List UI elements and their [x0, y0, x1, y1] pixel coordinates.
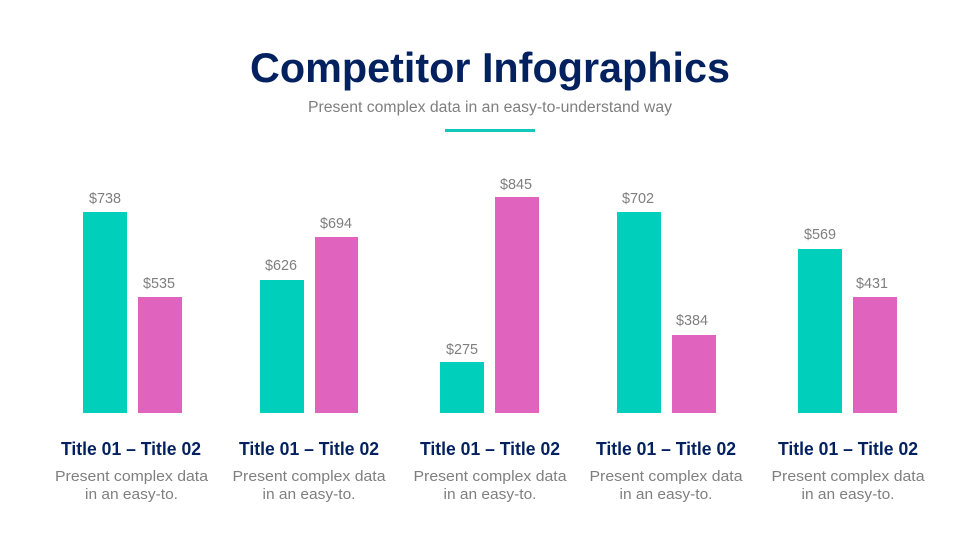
description: Present complex data — [55, 468, 209, 485]
description — [232, 468, 386, 503]
description: in an easy-to. — [262, 486, 356, 503]
bar: pink 694 — [315, 237, 358, 413]
value: 738: $738 — [89, 190, 121, 207]
bar: pink 845 — [495, 197, 539, 413]
subtitle: Present complex data in an easy-to-understand way — [308, 99, 672, 116]
bar: teal 626 — [260, 280, 304, 413]
description: Present complex data — [590, 468, 743, 485]
value: 694: $694 — [320, 215, 352, 232]
bar: teal 738 — [83, 212, 127, 413]
description: in an easy-to. — [85, 486, 178, 503]
description: in an easy-to. — [802, 486, 894, 503]
value: 431: $431 — [856, 275, 888, 292]
description: in an easy-to. — [620, 486, 712, 503]
heading: Title 01 – Title 02 — [778, 439, 918, 459]
bar: pink 431 — [853, 297, 897, 413]
panel: group 5 — [772, 226, 925, 503]
description: Present complex data — [772, 468, 925, 485]
heading: Title 01 – Title 02 — [61, 439, 201, 459]
bar: teal 702 — [617, 212, 661, 413]
bar: pink 535 — [138, 297, 182, 413]
value: 845: $845 — [500, 176, 532, 193]
heading: Title 01 – Title 02 — [420, 439, 560, 459]
bar: teal 569 — [798, 249, 842, 413]
description: in an easy-to. — [444, 486, 536, 503]
panel: group 2 — [232, 215, 386, 503]
value: 275: $275 — [446, 341, 478, 358]
value: 702: $702 — [622, 190, 654, 207]
accent underline — [445, 129, 535, 132]
heading: Title 01 – Title 02 — [239, 439, 379, 459]
bar: teal 275 — [440, 362, 484, 413]
bar: pink 384 — [672, 335, 716, 413]
title: Competitor Infographics — [250, 45, 730, 91]
value: 535: $535 — [143, 275, 175, 292]
description — [55, 468, 209, 503]
description — [414, 468, 567, 503]
heading: Title 01 – Title 02 — [596, 439, 736, 459]
description — [590, 468, 743, 503]
value: 626: $626 — [265, 257, 297, 274]
description: Present complex data — [232, 468, 386, 485]
value: 569: $569 — [804, 226, 836, 243]
panel: group 3 — [414, 176, 567, 503]
description: Present complex data — [414, 468, 567, 485]
panel: group 4 — [590, 190, 743, 503]
value: 384: $384 — [676, 312, 708, 329]
description — [772, 468, 925, 503]
panel: group 1 — [55, 190, 209, 503]
